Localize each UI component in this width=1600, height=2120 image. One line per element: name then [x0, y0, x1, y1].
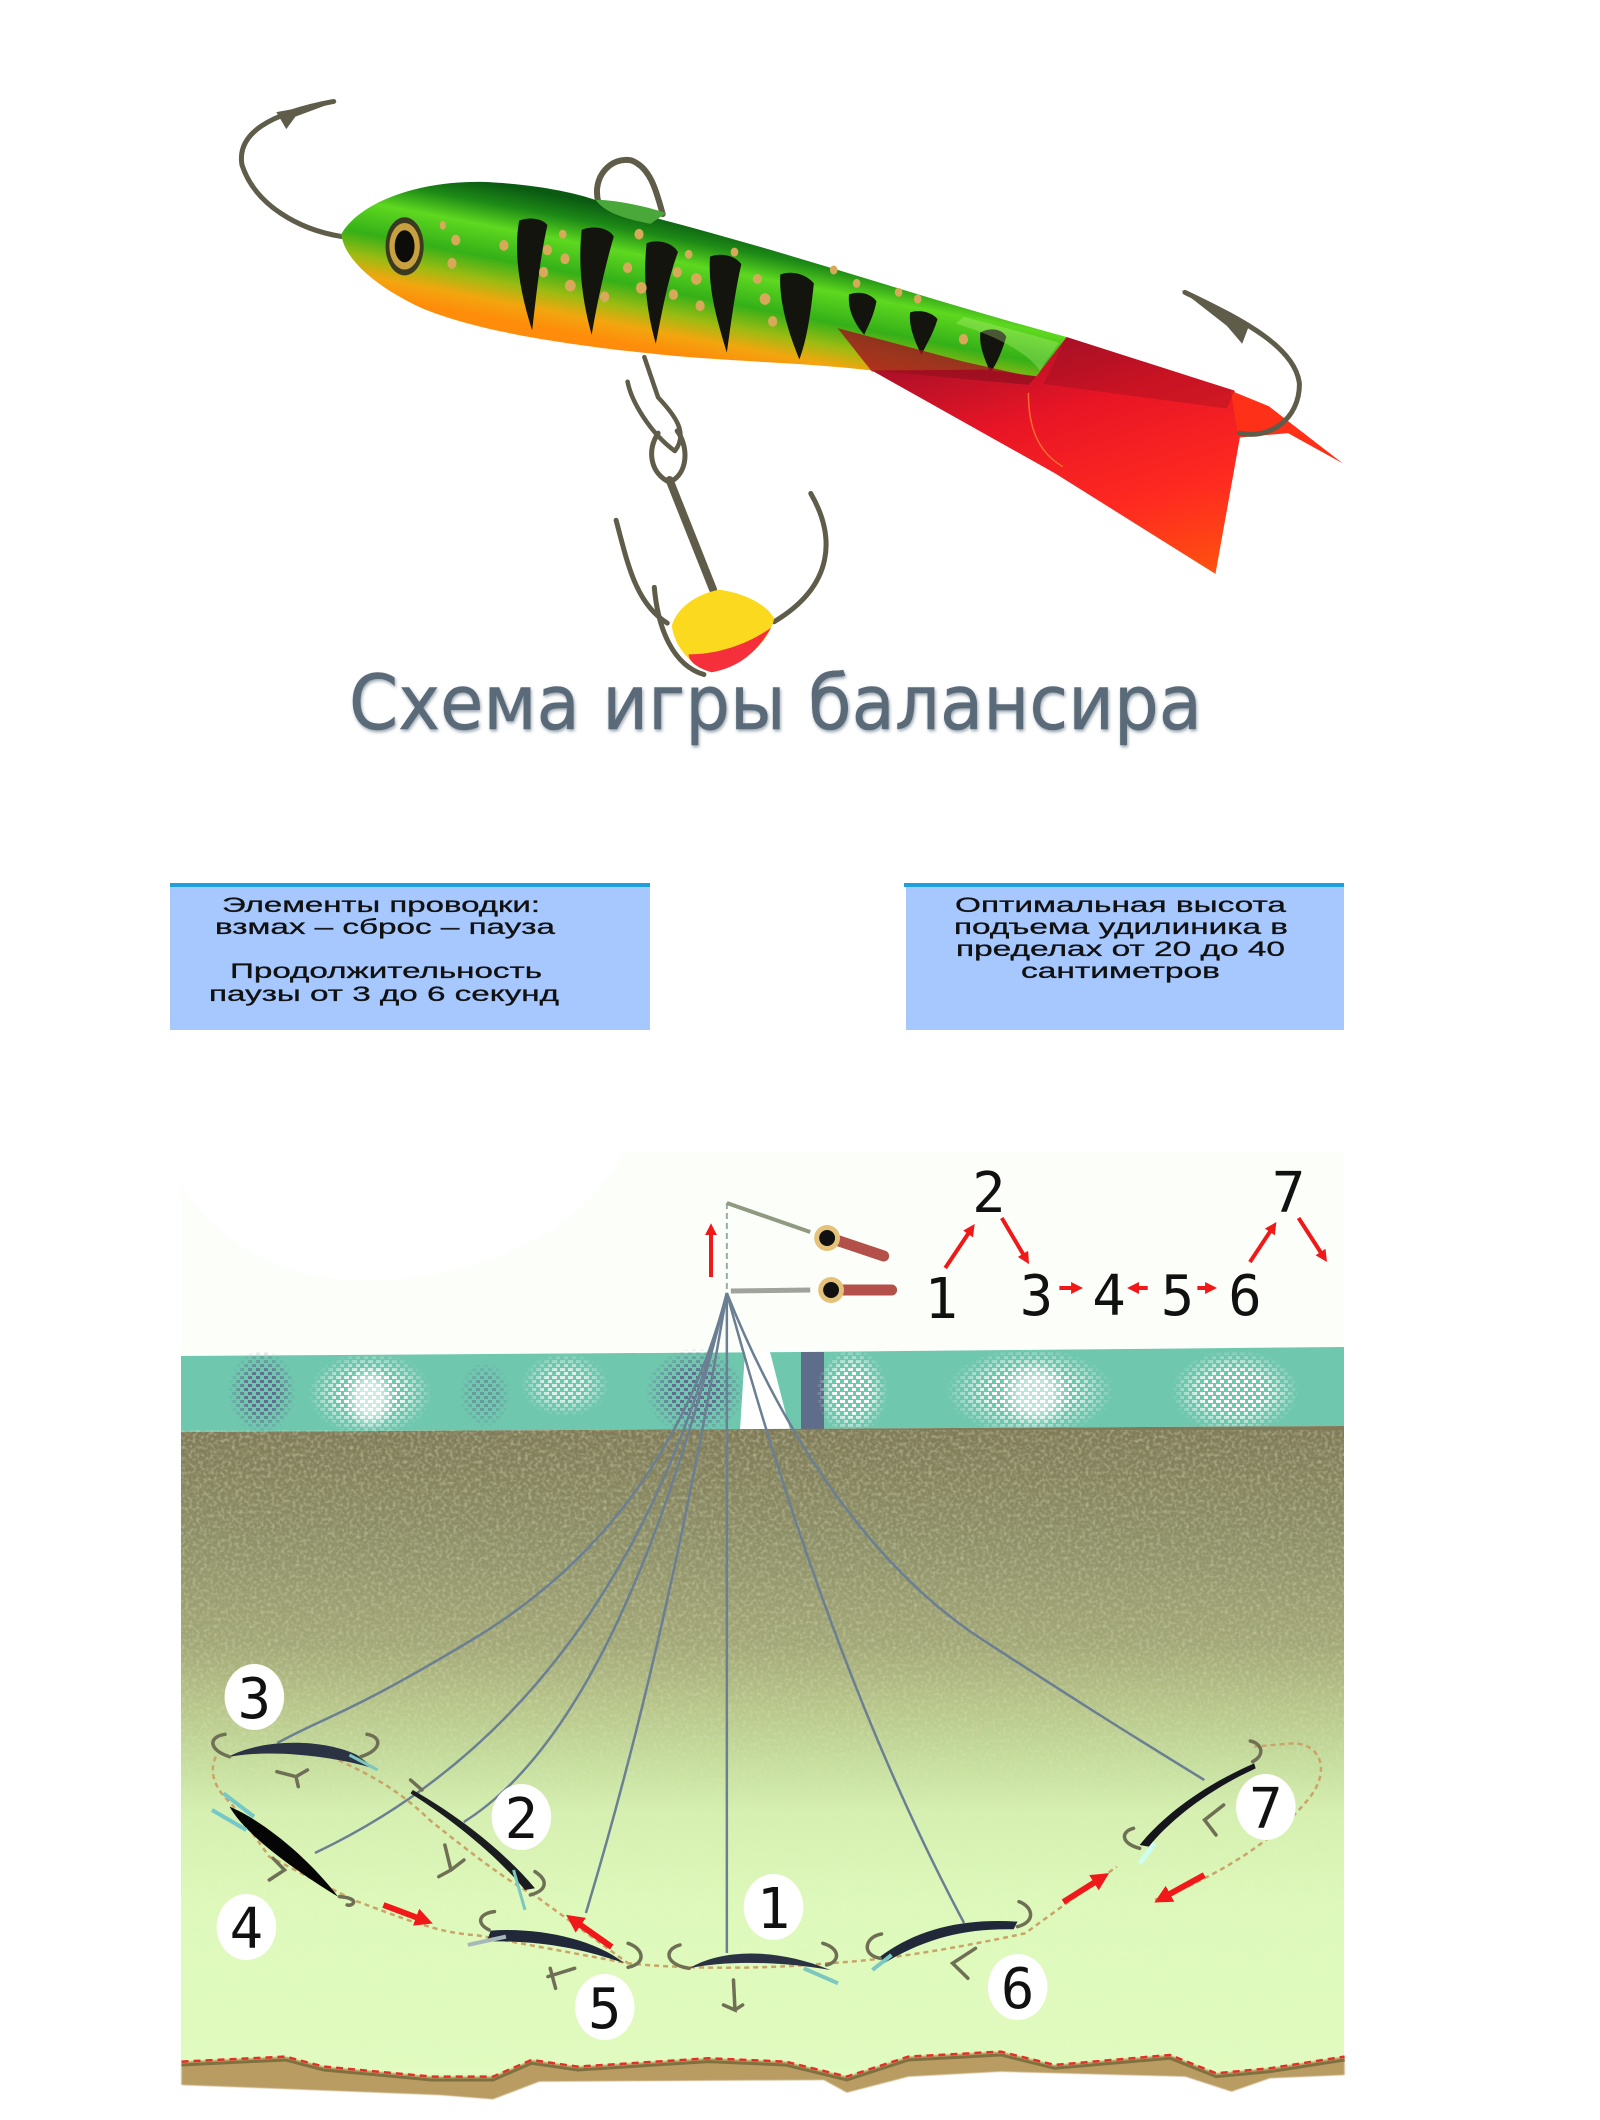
position number 3 [225, 1664, 284, 1732]
position number 5 [575, 1974, 635, 2042]
panel: rod lift height: Оптимальная высота [955, 894, 1286, 917]
arrow: rod lift [709, 1228, 713, 1277]
panel: retrieve elements [170, 883, 650, 1030]
panel: retrieve elements: взмах – сброс – пауза [215, 916, 556, 939]
rod positions [727, 1203, 892, 1303]
position number 4: 4 [230, 1897, 263, 1962]
icon: front hook [241, 101, 341, 236]
water column [181, 1426, 1344, 2090]
lake bottom [170, 2052, 1370, 2120]
trajectory arrows [383, 1875, 1204, 1947]
ring base [595, 200, 666, 224]
position number 1 [744, 1874, 803, 1942]
position number 3: 3 [238, 1667, 271, 1732]
icon: rear hook [1181, 290, 1299, 434]
panel: rod lift height: сантиметров [1021, 960, 1220, 983]
legend: movement sequence: 3 [1020, 1264, 1053, 1329]
legend: movement sequence: 7 [1272, 1161, 1305, 1226]
panel: retrieve elements: Продолжительность [230, 960, 542, 983]
position number 7: 7 [1249, 1777, 1283, 1842]
position number 5: 5 [588, 1977, 621, 2042]
lure positions [212, 1734, 1261, 2010]
fishing lines fan [277, 1293, 1204, 1953]
legend: movement sequence: 4 [1092, 1264, 1126, 1329]
position number 1: 1 [757, 1877, 790, 1942]
position 7 lure [1124, 1741, 1261, 1863]
legend: movement sequence: 5 [1161, 1264, 1194, 1329]
position number 6: 6 [1001, 1957, 1034, 2022]
legend: movement sequence: 1 [925, 1267, 958, 1332]
lure body [341, 182, 1067, 377]
sky background [181, 1152, 1344, 1360]
lure trajectory [213, 1743, 1321, 1968]
position 2 lure [411, 1780, 544, 1910]
diagram: lure movement under ice [170, 1152, 1370, 2120]
legend: movement sequence: 2 [972, 1161, 1006, 1226]
position number 7 [1236, 1774, 1296, 1842]
panel: rod lift height: пределах от 20 до 40 [956, 938, 1285, 961]
position 5 lure [468, 1912, 641, 1988]
title: Схема игры балансира [349, 658, 1202, 747]
position number 6 [988, 1954, 1047, 2022]
panel: retrieve elements: Элементы проводки: [222, 894, 540, 917]
lure gold speckles [440, 221, 968, 345]
position number 2 [492, 1784, 551, 1852]
icon: treble hook [616, 357, 826, 675]
water texture [181, 1430, 1344, 1786]
panel: rod lift height [904, 883, 1344, 1030]
lure gloss highlight [956, 317, 1059, 371]
lure red tail [838, 328, 1343, 574]
position 6 lure [867, 1902, 1031, 1978]
illustration: ice fishing balancer lure [241, 101, 1343, 675]
panel: rod lift height: подъема удилиника в [954, 916, 1288, 939]
position 3 lure [213, 1734, 378, 1787]
legend: movement sequence: 6 [1228, 1264, 1262, 1329]
icon: lure eye [386, 217, 424, 275]
position 4 lure [212, 1793, 354, 1905]
lure stripes [517, 218, 1006, 373]
ice layer [181, 1347, 1344, 1436]
position 1 lure [669, 1943, 838, 2010]
legend: movement sequence [925, 1161, 1324, 1332]
position number 2: 2 [505, 1787, 538, 1852]
position number 4 [217, 1894, 276, 1962]
icon: top line ring [597, 160, 663, 214]
panel: retrieve elements: паузы от 3 до 6 секунд [209, 983, 559, 1006]
